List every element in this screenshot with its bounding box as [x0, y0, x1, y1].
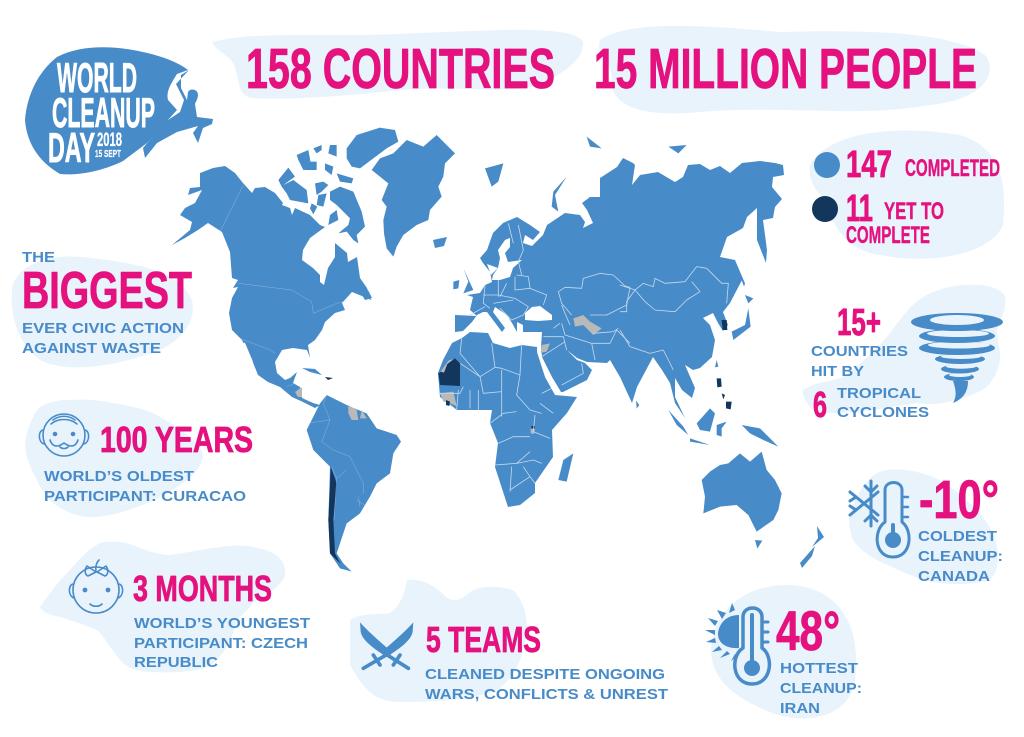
panel: tropical cyclones: 6: [813, 384, 827, 425]
map: Tasmania: [755, 540, 762, 549]
map: Indonesia: [668, 408, 727, 445]
panel: tropical cyclones: HIT BY: [811, 363, 864, 380]
world map: [172, 128, 824, 572]
panel: five teams: 5 TEAMS: [426, 619, 541, 660]
map: Newfoundland: [362, 290, 372, 300]
panel: oldest participant: [25, 400, 253, 517]
map: Jordan: [541, 343, 550, 353]
map: Skagerrak: [487, 264, 498, 275]
logo text: 15 SEPT: [95, 149, 121, 160]
panel: tropical cyclones: CYCLONES: [837, 404, 929, 421]
panel: youngest participant: 3 MONTHS: [133, 568, 272, 609]
panel: coldest cleanup: -10°: [919, 470, 999, 530]
panel: coldest cleanup: CLEANUP:: [918, 548, 1003, 565]
panel: hottest cleanup: CLEANUP:: [780, 680, 862, 697]
logo text: WORLD: [57, 54, 137, 101]
map: Australia: [702, 452, 782, 532]
legend: completed: [814, 144, 1000, 186]
panel: youngest participant: PARTICIPANT: CZECH: [134, 635, 308, 652]
map: Western Sahara: [441, 359, 454, 373]
legend: completed: 147: [846, 144, 892, 186]
panel: oldest participant: PARTICIPANT: CURACAO: [44, 488, 246, 505]
map: Sri Lanka: [636, 401, 639, 409]
panel: oldest participant: WORLD’S OLDEST: [44, 468, 194, 485]
panel: youngest participant: [40, 542, 310, 672]
map: Iceland: [433, 237, 447, 248]
panel: tropical cyclones: [803, 285, 1005, 425]
panel: five teams: WARS, CONFLICTS & UNREST: [425, 686, 668, 703]
logo: World Cleanup Day: [25, 47, 213, 174]
panel: oldest participant: 100 YEARS: [100, 419, 253, 460]
map: Cuba: [302, 368, 322, 375]
icon: tornado: [911, 313, 1003, 403]
panel: coldest cleanup: [849, 469, 1003, 585]
map: Europe and West Asia borders: [470, 223, 630, 385]
map: Gulf of California: [244, 343, 252, 362]
map: New Guinea: [742, 425, 778, 447]
icon: snowflake: [850, 481, 878, 526]
panel: biggest: EVER CIVIC ACTION: [22, 320, 184, 337]
panel: tropical cyclones: TROPICAL: [837, 385, 921, 402]
logo text: CLEANUP: [52, 89, 155, 136]
map: Mauritania: [438, 358, 460, 386]
map: UK and Ireland: [453, 268, 473, 293]
map: South America: [307, 395, 401, 572]
icon: crossed swords: [360, 622, 413, 668]
map: Guyana and Suriname: [348, 405, 367, 420]
header: 158 countries: [212, 30, 583, 101]
map: Hispaniola: [325, 377, 333, 380]
map: East Asia borders: [620, 267, 728, 370]
map: Guinea: [440, 392, 457, 406]
legend: yet to complete: 11: [846, 188, 873, 230]
map: Rwanda and Burundi: [531, 426, 535, 434]
panel: hottest cleanup: 48°: [776, 599, 840, 662]
map: Japan and Sakhalin islands: [715, 260, 753, 367]
map: Turkmenistan: [573, 315, 602, 335]
panel: coldest cleanup: COLDEST: [918, 528, 997, 545]
logo text: DAY: [48, 124, 95, 171]
icon: thermometer: [877, 482, 909, 557]
map: Eurasia: [455, 158, 784, 418]
map: Africa borders: [440, 338, 553, 492]
map: Baltic Sea: [492, 238, 522, 280]
map: South Korea: [722, 320, 727, 330]
panel: youngest participant: REPUBLIC: [134, 654, 218, 671]
panel: coldest cleanup: CANADA: [918, 568, 990, 585]
map: Nicaragua: [295, 387, 302, 397]
legend: yet to complete: COMPLETE: [846, 222, 930, 249]
panel: five teams: [350, 580, 668, 703]
logo climber: [143, 70, 213, 158]
panel: biggest: THE: [22, 249, 55, 266]
panel: youngest participant: WORLD’S YOUNGEST: [134, 615, 310, 632]
icon: baby face: [69, 560, 123, 613]
legend: [810, 130, 1004, 259]
map: Sierra Leone: [446, 400, 450, 406]
icon: sun and thermometer: [705, 603, 769, 684]
panel: tropical cyclones: 15+: [837, 302, 881, 344]
header: 158 countries: 158 COUNTRIES: [246, 37, 555, 101]
logo blob: [25, 47, 188, 174]
icon: old man face: [39, 414, 89, 456]
panel: biggest: [12, 249, 193, 367]
header: 15 million people: [594, 26, 990, 113]
map: Arctic archipelagos: [485, 137, 687, 212]
panel: tropical cyclones: COUNTRIES: [811, 343, 908, 360]
panel: biggest: BIGGEST: [22, 262, 192, 320]
map: Philippines: [717, 378, 732, 409]
map: Greenland: [372, 135, 455, 257]
map: Black Sea: [525, 306, 552, 321]
map: Chile: [328, 467, 341, 564]
map: Americas borders: [220, 185, 367, 520]
logo text: 2018: [97, 130, 122, 151]
panel: biggest: AGAINST WASTE: [22, 340, 161, 357]
legend: yet to complete: YET TO: [884, 198, 944, 225]
map: North America: [172, 166, 371, 408]
panel: hottest cleanup: HOTTEST: [780, 660, 858, 677]
panel: hottest cleanup: [705, 585, 862, 718]
panel: hottest cleanup: IRAN: [780, 700, 820, 717]
map: Madagascar: [558, 453, 573, 482]
logo text: [48, 54, 155, 171]
map: Africa: [438, 332, 577, 507]
map: New Zealand: [800, 526, 824, 568]
panel: five teams: CLEANED DESPITE ONGOING: [425, 666, 665, 683]
map: Arctic islands: [278, 128, 398, 243]
legend: yet to complete: [812, 188, 944, 249]
